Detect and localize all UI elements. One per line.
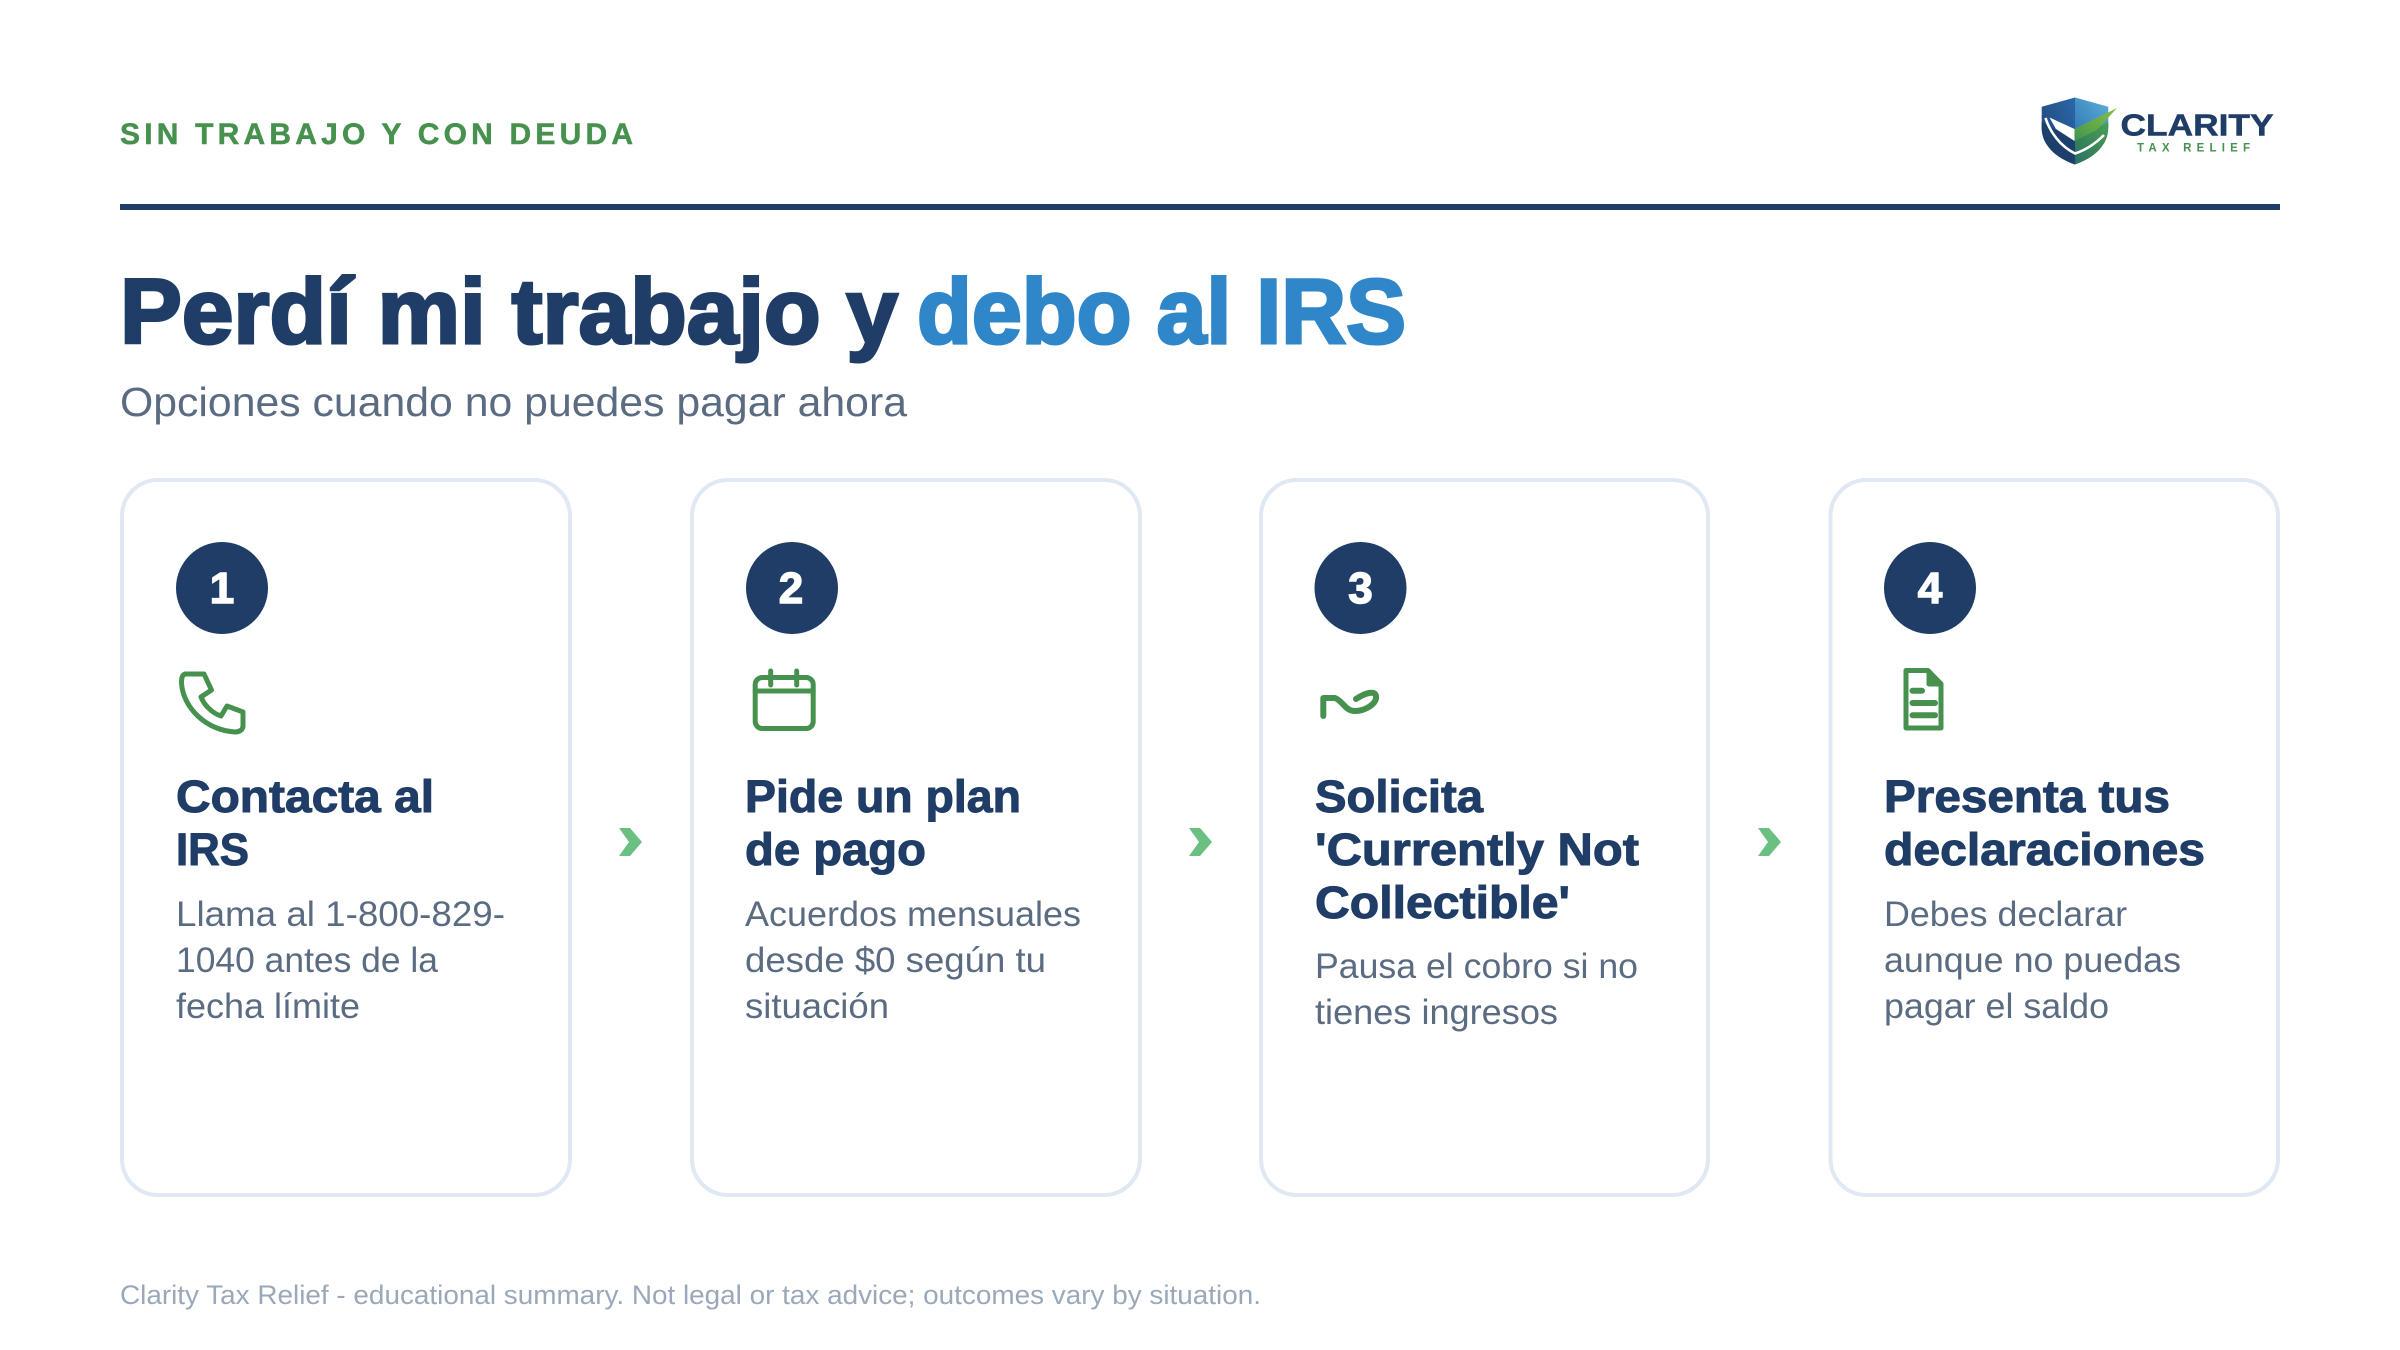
step 1 description: 1040 antes de la [176,941,439,980]
arrow 1 [619,828,642,856]
panel: step 1 [122,480,570,1195]
step 3 heading: Solicita [1315,771,1484,822]
step 1 heading: IRS [176,824,249,875]
footer disclaimer: Clarity Tax Relief - educational summary. Not legal or tax advice; outcomes vary by situation. [120,1280,1261,1310]
step number 2: 2 [779,564,803,613]
step 1 heading: Contacta al [176,771,434,822]
step number 3: 3 [1348,564,1373,613]
step number 1: 1 [210,564,234,613]
title: Perdí mi trabajo y [120,261,898,363]
title: debo al IRS [917,261,1406,363]
step 3 heading: Collectible' [1315,877,1570,928]
step number 4: 4 [1918,564,1943,613]
step 4 heading: Presenta tus [1884,771,2170,822]
step 3 heading: 'Currently Not [1315,824,1639,875]
step 4 heading: declaraciones [1884,824,2205,875]
step 3 description: Pausa el cobro si no [1315,947,1638,986]
step 1 description: fecha límite [176,987,360,1026]
panel: step 4 [1830,480,2278,1195]
eyebrow label: SIN TRABAJO Y CON DEUDA [120,118,633,151]
header rule [120,204,2280,210]
step 2 heading: de pago [745,824,926,875]
step 4 description: aunque no puedas [1884,941,2181,980]
arrow 3 [1758,828,1781,856]
step 2 description: situación [745,987,889,1026]
step number 4 [1884,542,1976,634]
step 2 description: desde $0 según tu [745,941,1046,980]
icon: handshake [1323,693,1376,716]
icon: phone [182,674,243,732]
step number 1 [176,542,268,634]
panel: step 2 [692,480,1140,1195]
step 3 description: tienes ingresos [1315,993,1558,1032]
step 2 description: Acuerdos mensuales [745,895,1081,934]
logo wordmark: CLARITY [2120,108,2274,143]
icon: shield with check [2042,98,2117,164]
icon: document [1906,670,1941,728]
step 4 description: pagar el saldo [1884,987,2109,1026]
step 2 heading: Pide un plan [745,771,1021,822]
logo: Clarity Tax Relief [2042,98,2274,164]
step number 2 [746,542,838,634]
step number 3 [1314,542,1406,634]
subtitle: Opciones cuando no puedes pagar ahora [120,379,907,425]
step 4 description: Debes declarar [1884,895,2127,934]
arrow 2 [1189,828,1212,856]
step 1 description: Llama al 1-800-829- [176,895,505,934]
logo tagline: TAX RELIEF [2137,143,2250,155]
panel: step 3 [1261,480,1708,1195]
icon: calendar [755,671,813,728]
